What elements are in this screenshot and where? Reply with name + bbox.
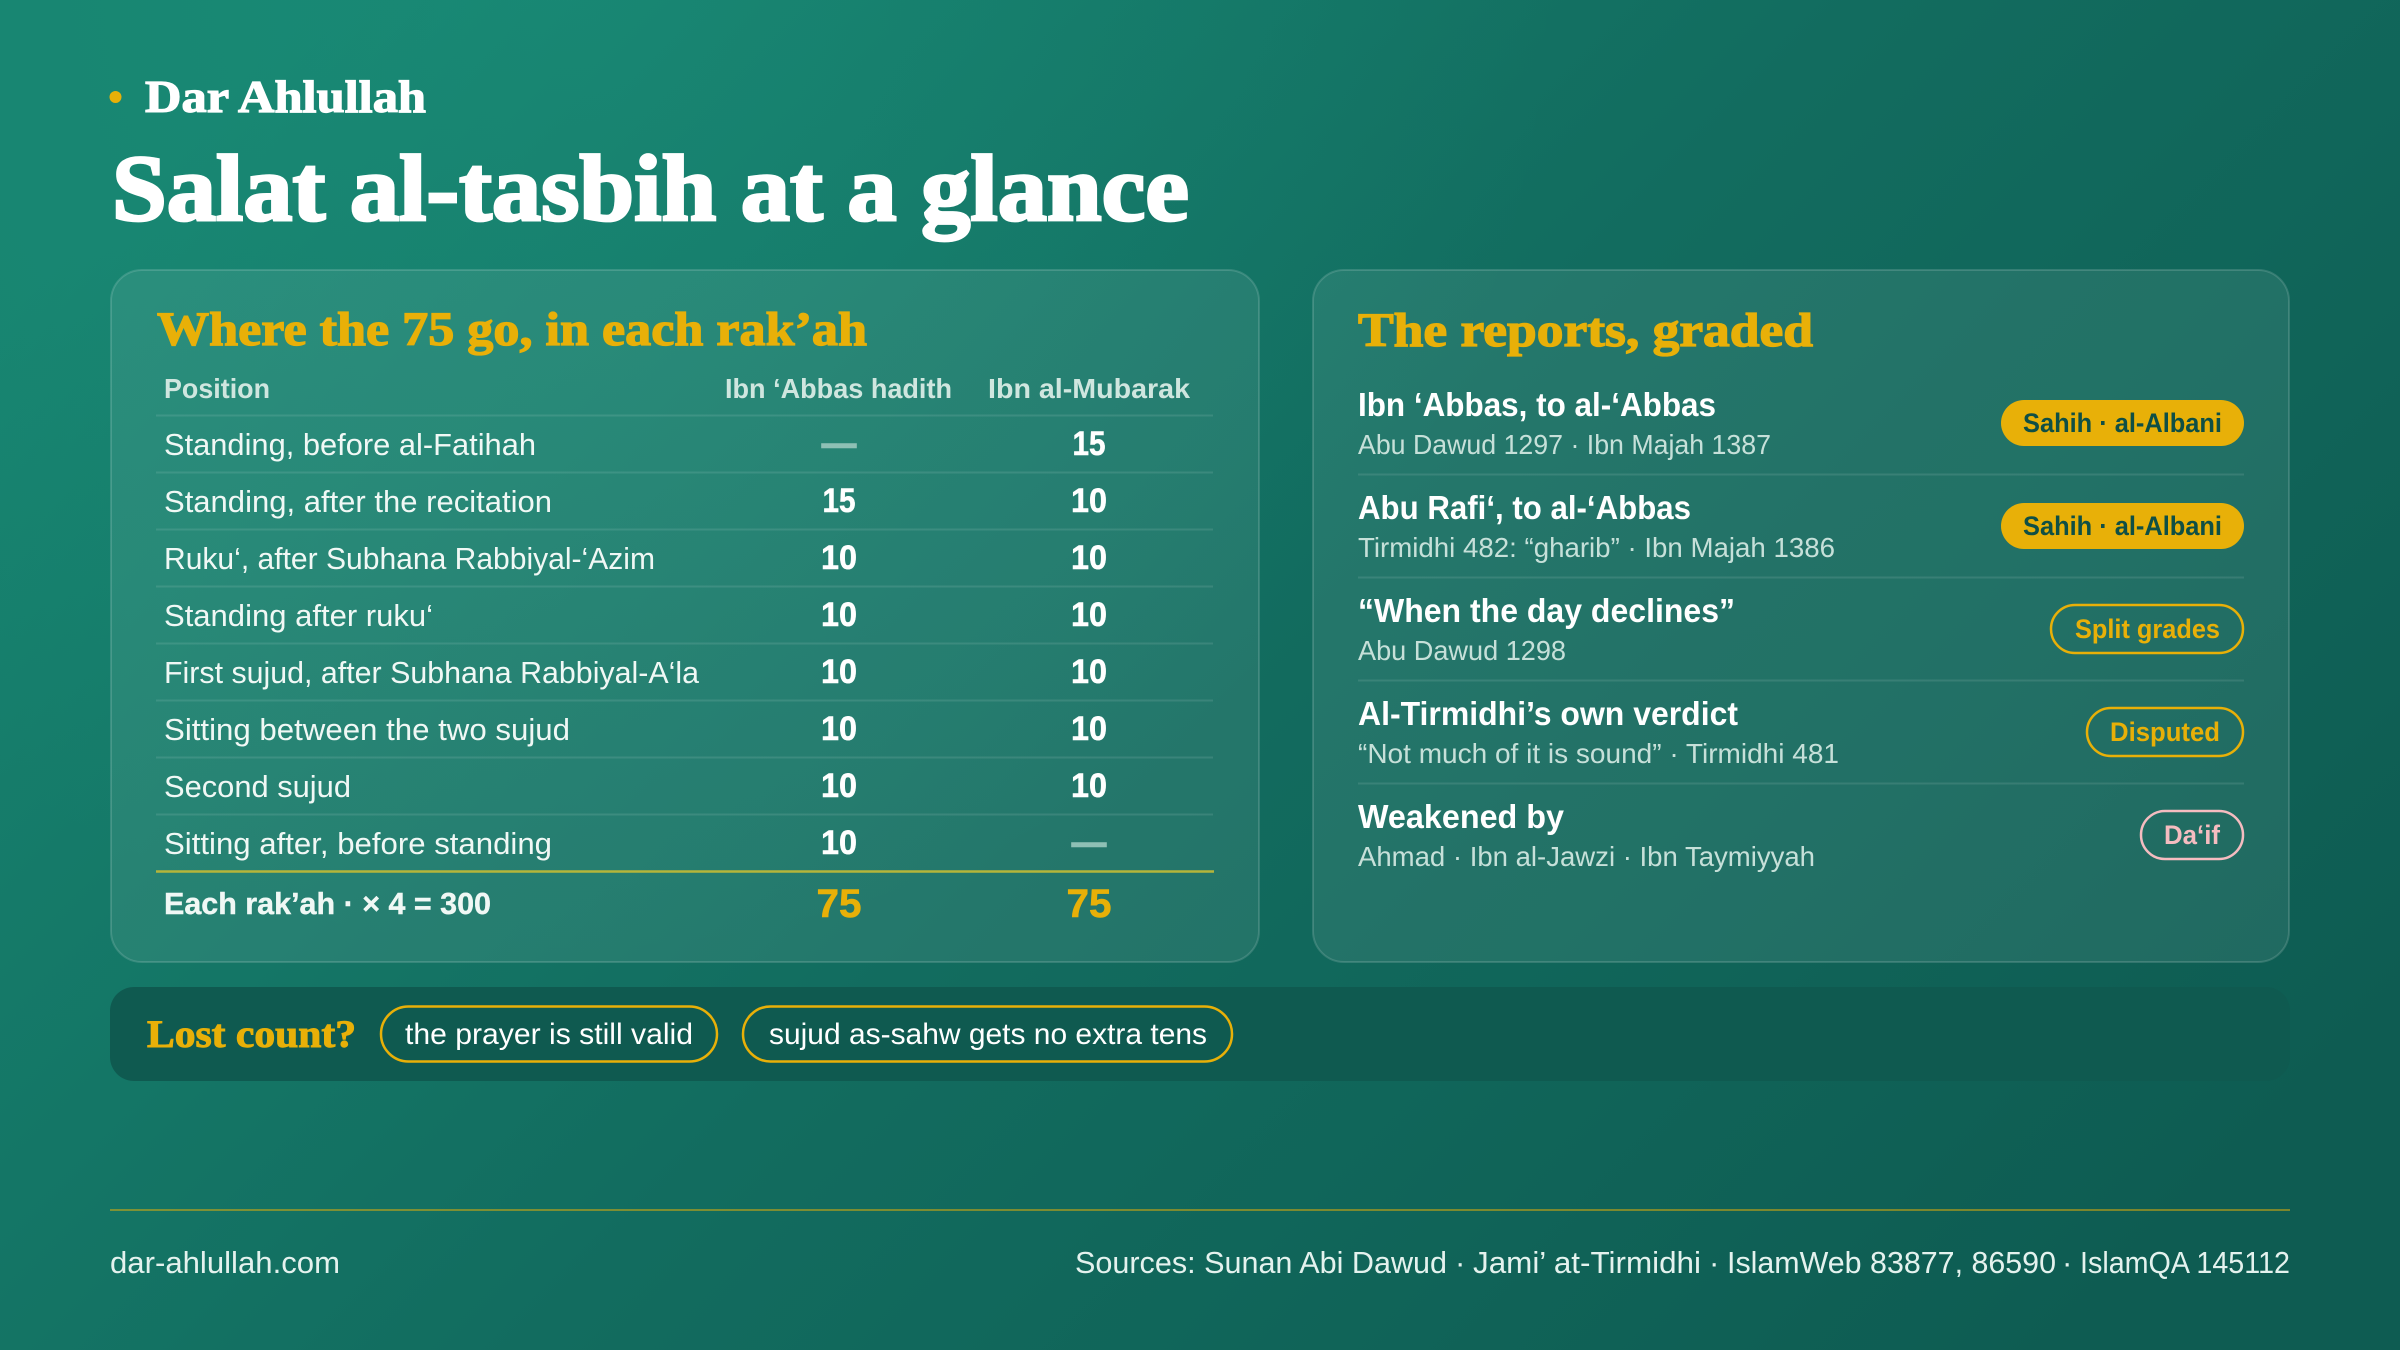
row: standing after recitation: 15 bbox=[822, 482, 856, 520]
footer sources: · bbox=[1455, 1245, 1465, 1280]
row: sitting between sujud: Sitting between the two sujud bbox=[164, 712, 570, 747]
row: sitting between sujud bbox=[164, 710, 1107, 748]
row: ruku: 10 bbox=[1071, 539, 1107, 577]
report: Abu Rafi bbox=[1358, 489, 2244, 563]
row: standing after recitation: 10 bbox=[1071, 482, 1107, 520]
row: ruku: Ruku‘, after Subhana Rabbiyal-‘Azim bbox=[164, 541, 655, 576]
panel heading: Where the 75 go, in each rak’ah bbox=[157, 303, 867, 356]
report: al-Tirmidhi verdict bbox=[1358, 695, 2243, 769]
footer sources: IslamQA 145112 bbox=[2080, 1245, 2290, 1280]
footer sources: Sources: Sunan Abi Dawud bbox=[1075, 1245, 1447, 1280]
row: first sujud bbox=[164, 653, 1107, 691]
row: standing before al-Fatihah: 15 bbox=[1072, 425, 1106, 463]
row: second sujud: 10 bbox=[1071, 767, 1107, 805]
report: Ibn Abbas: Ibn ‘Abbas, to al-‘Abbas bbox=[1358, 386, 1716, 423]
report: Abu Rafi: Abu Rafi‘, to al-‘Abbas bbox=[1358, 489, 1691, 526]
report: when the day declines bbox=[1358, 592, 2243, 666]
row: standing after recitation bbox=[164, 482, 1107, 520]
row: totals bbox=[164, 882, 1112, 926]
footer sources: IslamWeb 83877, 86590 bbox=[1727, 1245, 2056, 1280]
badge: split grades: Split grades bbox=[2075, 614, 2220, 644]
row: sitting after: — bbox=[1072, 824, 1106, 862]
footer sources: Jami’ at-Tirmidhi bbox=[1473, 1245, 1701, 1280]
table header: Position bbox=[164, 373, 270, 404]
badge: disputed bbox=[2087, 708, 2243, 756]
badge: sahih: Sahih · al-Albani bbox=[2023, 408, 2222, 438]
report: weakened by: Weakened by bbox=[1358, 798, 1565, 835]
report: Abu Rafi: Tirmidhi 482: “gharib” · Ibn Majah 1386 bbox=[1358, 532, 1835, 563]
badge: sahih bbox=[2001, 400, 2244, 446]
row: sitting after bbox=[164, 824, 1106, 862]
row: totals: 75 bbox=[816, 882, 862, 926]
callout strip: lost count bbox=[110, 987, 2290, 1081]
panel heading: The reports, graded bbox=[1358, 304, 1813, 357]
title: Salat al-tasbih at a glance bbox=[112, 137, 1189, 241]
footer site name: dar-ahlullah.com bbox=[110, 1245, 340, 1280]
footer sources: · bbox=[2062, 1245, 2072, 1280]
brand line bbox=[110, 71, 426, 122]
footer sources: · bbox=[1709, 1245, 1719, 1280]
table header: Ibn al-Mubarak bbox=[988, 373, 1190, 404]
row: second sujud bbox=[164, 767, 1107, 805]
row: ruku: 10 bbox=[821, 539, 857, 577]
row: standing after ruku: 10 bbox=[1071, 596, 1107, 634]
badge: sahih bbox=[2001, 503, 2244, 549]
chip: sujud as-sahw: sujud as-sahw gets no extra tens bbox=[769, 1018, 1207, 1051]
panel: the reports, graded bbox=[1313, 270, 2289, 962]
icon: brand dot bbox=[110, 91, 122, 103]
row: totals: 75 bbox=[1066, 882, 1112, 926]
table header: Ibn ‘Abbas hadith bbox=[725, 373, 952, 404]
report: Ibn Abbas: Abu Dawud 1297 · Ibn Majah 1387 bbox=[1358, 429, 1771, 460]
row: standing after ruku: Standing after ruku‘ bbox=[164, 598, 433, 633]
report: al-Tirmidhi verdict: Al-Tirmidhi’s own verdict bbox=[1358, 695, 1738, 732]
row: standing before al-Fatihah: — bbox=[822, 425, 856, 463]
chip: prayer still valid bbox=[381, 1006, 717, 1062]
brand name: Dar Ahlullah bbox=[145, 71, 426, 122]
badge: daif: Da‘if bbox=[2164, 820, 2221, 850]
row: first sujud: 10 bbox=[1071, 653, 1107, 691]
badge: daif bbox=[2141, 811, 2243, 859]
row: sitting after: Sitting after, before standing bbox=[164, 826, 552, 861]
row: ruku bbox=[164, 539, 1107, 577]
row: first sujud: 10 bbox=[821, 653, 857, 691]
row: sitting between sujud: 10 bbox=[1071, 710, 1107, 748]
row: totals: Each rak’ah · × 4 = 300 bbox=[164, 886, 491, 921]
chip: sujud as-sahw bbox=[743, 1006, 1232, 1062]
row: first sujud: First sujud, after Subhana Rabbiyal-A‘la bbox=[164, 655, 700, 690]
report: al-Tirmidhi verdict: “Not much of it is sound” · Tirmidhi 481 bbox=[1358, 738, 1839, 769]
chip: prayer still valid: the prayer is still valid bbox=[405, 1018, 693, 1051]
report: weakened by: Ahmad · Ibn al-Jawzi · Ibn Taymiyyah bbox=[1358, 841, 1815, 872]
row: sitting after: 10 bbox=[821, 824, 857, 862]
report: when the day declines: Abu Dawud 1298 bbox=[1358, 635, 1566, 666]
badge: disputed: Disputed bbox=[2110, 717, 2220, 747]
panel: where the 75 go table bbox=[111, 270, 1259, 962]
row: standing before al-Fatihah: Standing, before al-Fatihah bbox=[164, 427, 536, 462]
callout label: Lost count? bbox=[147, 1013, 356, 1056]
footer sources bbox=[1075, 1245, 2290, 1280]
footer bbox=[110, 1209, 2290, 1280]
report: Ibn Abbas bbox=[1358, 386, 2244, 460]
row: standing after ruku bbox=[164, 596, 1107, 634]
row: standing after ruku: 10 bbox=[821, 596, 857, 634]
row: standing after recitation: Standing, after the recitation bbox=[164, 484, 552, 519]
report: weakened by bbox=[1358, 798, 2243, 872]
report: when the day declines: “When the day declines” bbox=[1358, 592, 1735, 629]
row: sitting between sujud: 10 bbox=[821, 710, 857, 748]
row: standing before al-Fatihah bbox=[164, 425, 1106, 463]
badge: sahih: Sahih · al-Albani bbox=[2023, 511, 2222, 541]
table header bbox=[164, 373, 1190, 404]
badge: split grades bbox=[2051, 605, 2243, 653]
row: second sujud: Second sujud bbox=[164, 769, 351, 804]
row: second sujud: 10 bbox=[821, 767, 857, 805]
